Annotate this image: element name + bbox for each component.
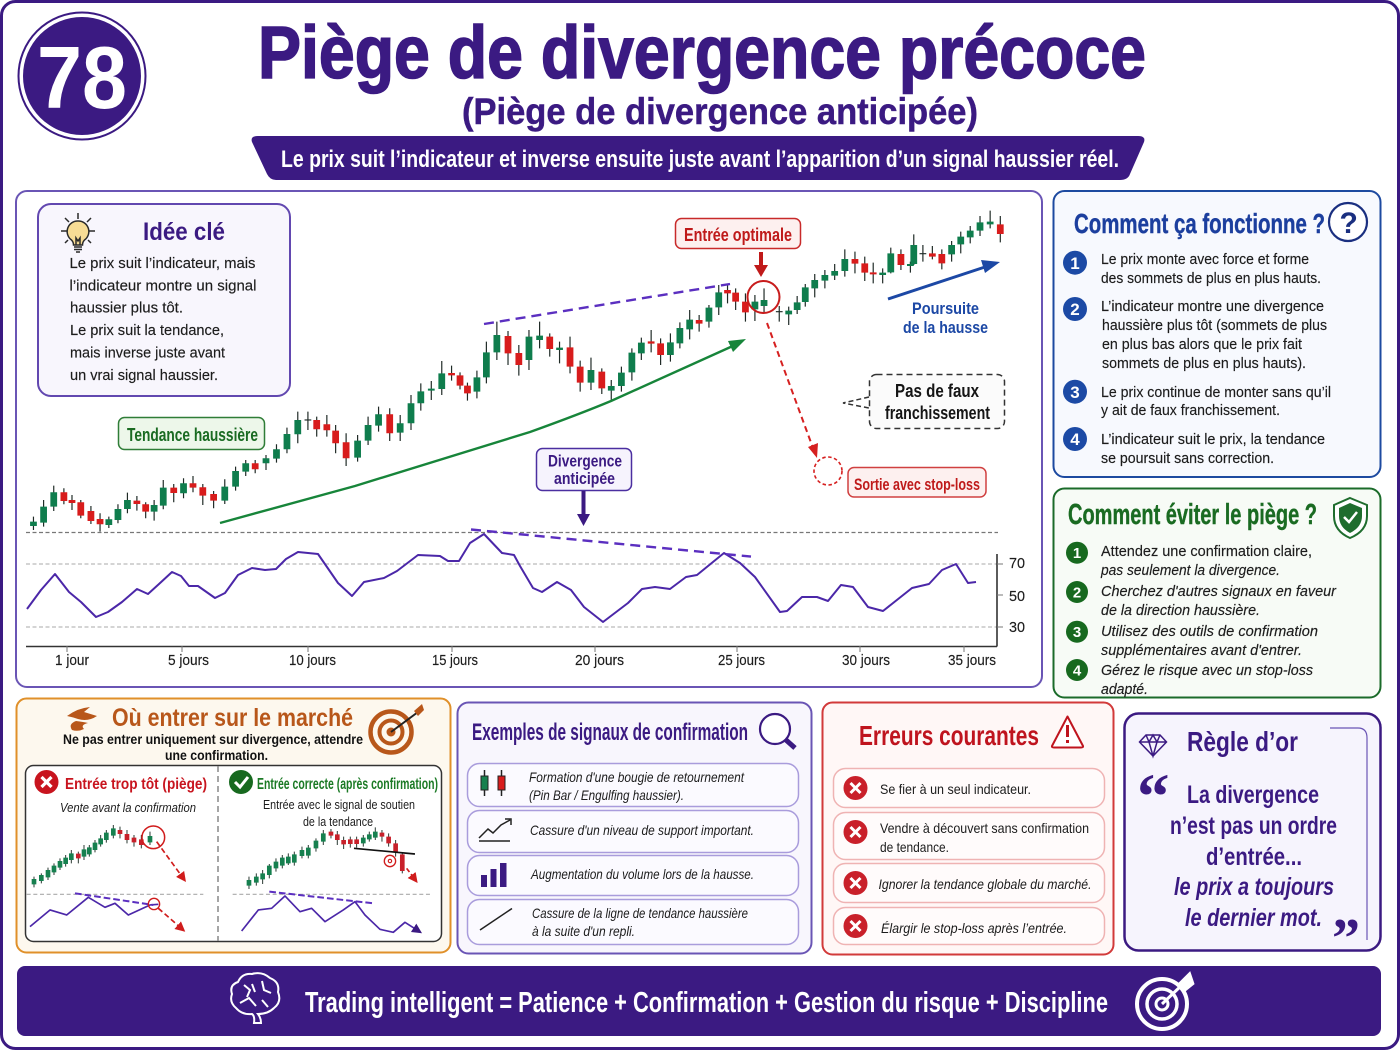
icon: target: [1137, 972, 1194, 1029]
label: optimal entry: Entrée optimale: [684, 225, 792, 245]
indicator reference lines: [26, 532, 998, 627]
heading: Règle d’or: [1187, 726, 1298, 757]
quote text: [1170, 781, 1337, 932]
heading: too early: Entrée trop tôt (piège): [65, 776, 207, 793]
label: early divergence: [536, 448, 632, 490]
row: support break: [468, 810, 798, 852]
key idea text: un vrai signal haussier.: [70, 367, 218, 384]
arrow: divergence down: [577, 491, 590, 526]
tip numbers: 2: [1073, 584, 1081, 602]
green trend arrow: [220, 339, 746, 523]
steps text: en plus bas alors que le prix fait: [1102, 336, 1303, 353]
row: trendline break: à la suite d'un repli.: [532, 923, 635, 939]
tips text: pas seulement la divergence.: [1100, 562, 1280, 579]
footer banner: [17, 966, 1381, 1036]
caption: too early: Vente avant la confirmation: [60, 800, 196, 815]
arrow: entry down: [754, 252, 768, 277]
step numbers: 1: [1070, 254, 1080, 273]
time axis: [26, 554, 1025, 669]
label: early divergence: Divergence: [548, 452, 622, 470]
row: ignore trend: Ignorer la tendance globale du marché.: [878, 876, 1092, 892]
quote text: d’entrée...: [1206, 843, 1302, 871]
price divergence line: [484, 284, 730, 324]
panel: confirmation signals: [458, 702, 812, 954]
price candlesticks: [33, 211, 1000, 532]
number badge: 78: [37, 28, 127, 127]
panel: common mistakes: [822, 702, 1114, 954]
row: trendline break: Cassure de la ligne de tendance haussière: [532, 905, 748, 921]
steps text: sommets de plus en plus hauts).: [1102, 355, 1306, 372]
row: single indicator: [834, 768, 1104, 808]
indicator divergence line: [471, 530, 751, 557]
step numbers: 2: [1070, 300, 1080, 319]
time axis: 5 jours: [168, 652, 209, 669]
icon: shield: [1334, 498, 1367, 538]
tip numbers: [1066, 542, 1088, 681]
heading: Idée clé: [143, 218, 225, 246]
icon: swoosh: [67, 707, 97, 731]
key idea text: haussier plus tôt.: [70, 300, 183, 316]
panel: avoid the trap: [1054, 488, 1380, 698]
title: Piège de divergence précoce: [258, 11, 1146, 94]
key idea text: mais inverse juste avant: [70, 344, 226, 362]
steps text: Le prix continue de monter sans qu’il: [1101, 384, 1331, 401]
tips text: supplémentaires avant d'entrer.: [1101, 642, 1302, 659]
time axis: 10 jours: [289, 652, 336, 669]
closing quote: ”: [1332, 908, 1360, 970]
time axis: 30 jours: [842, 652, 890, 669]
row: short selling: de tendance.: [880, 839, 949, 855]
key idea text: Le prix suit la tendance,: [70, 322, 224, 339]
steps text: y ait de faux franchissement.: [1101, 402, 1280, 419]
icon: check: [229, 770, 253, 794]
panel: how it works: [1054, 191, 1380, 477]
icon: diamond: [1140, 735, 1166, 756]
row: reversal candle: (Pin Bar / Engulfing haussier).: [529, 787, 684, 803]
time axis: 15 jours: [432, 652, 478, 669]
heading: Exemples de signaux de confirmation: [472, 719, 748, 746]
steps text: L’indicateur suit le prix, la tendance: [1101, 431, 1325, 448]
label: uptrend: [118, 418, 264, 450]
time axis: 70: [1009, 555, 1025, 572]
key idea text: Le prix suit l’indicateur, mais: [70, 255, 256, 272]
inner comparison box: [26, 766, 442, 942]
row: widen stop: Élargir le stop-loss après l’entrée.: [881, 920, 1067, 936]
tip numbers: 3: [1073, 624, 1081, 641]
ribbon tagline: Le prix suit l’indicateur et inverse ensuite juste avant l’apparition d’un signal haussier réel.: [281, 146, 1119, 173]
steps text: Le prix monte avec force et forme: [1101, 251, 1309, 268]
subtitle: [63, 732, 363, 763]
chart: early entry: [27, 825, 203, 931]
steps text: haussière plus tôt (sommets de plus: [1102, 317, 1327, 334]
chart: correct entry: [233, 827, 431, 932]
time axis: 50: [1009, 588, 1025, 605]
indicator line: [27, 534, 976, 622]
tips text: [1100, 543, 1337, 698]
label: continuation: de la hausse: [903, 318, 988, 337]
quote text: La divergence: [1187, 781, 1319, 809]
caption: correct entry: de la tendance: [303, 814, 373, 829]
tip numbers: 4: [1073, 662, 1082, 680]
tips text: Attendez une confirmation claire,: [1101, 543, 1312, 560]
opening quote: “: [1137, 761, 1170, 833]
label: stop-loss exit: [848, 468, 986, 497]
icon: target: [370, 704, 424, 752]
quote text: n’est pas un ordre: [1170, 812, 1337, 840]
tips text: Utilisez des outils de confirmation: [1101, 623, 1318, 640]
number badge: [18, 12, 146, 140]
tip numbers: 1: [1073, 545, 1081, 562]
label: continuation: [903, 299, 988, 337]
heading: Où entrer sur le marché: [112, 704, 353, 732]
tips text: Gérez le risque avec un stop-loss: [1101, 662, 1313, 679]
row: support break: Cassure d'un niveau de support important.: [530, 822, 754, 838]
arrow: stop-loss path: [767, 323, 818, 458]
row: short selling: Vendre à découvert sans confirmation: [880, 820, 1089, 836]
row: volume: Augmentation du volume lors de la hausse.: [530, 866, 754, 882]
circle: stop-loss point: [814, 457, 842, 485]
callout: no false breakout: Pas de faux: [895, 381, 979, 401]
panel: golden rule: [1124, 714, 1380, 970]
steps text: L’indicateur montre une divergence: [1101, 298, 1324, 315]
callout: no false breakout: franchissement: [885, 403, 990, 423]
caption: correct entry: Entrée avec le signal de soutien: [263, 797, 415, 812]
steps text: des sommets de plus en plus hauts.: [1101, 270, 1321, 287]
time axis: 35 jours: [948, 652, 996, 669]
panel: main chart: [16, 191, 1042, 687]
row: single indicator: Se fier à un seul indicateur.: [880, 781, 1031, 797]
key idea text: l’indicateur montre un signal: [70, 278, 256, 294]
key idea text: [70, 255, 256, 384]
tips text: adapté.: [1101, 681, 1148, 698]
row: trendline break: [468, 900, 798, 944]
row: reversal candle: [468, 764, 798, 806]
blue continuation arrow: [888, 260, 1000, 299]
time axis: 30: [1009, 619, 1025, 636]
callout: no false breakout: [843, 374, 1004, 428]
icon: brain: [231, 973, 279, 1023]
icon: question mark: [1329, 203, 1367, 241]
step numbers: 4: [1070, 430, 1080, 449]
label: stop-loss exit: Sortie avec stop-loss: [854, 475, 980, 494]
quote text: le dernier mot.: [1185, 904, 1322, 932]
panel: key idea: [38, 204, 290, 396]
subtitle: Ne pas entrer uniquement sur divergence, attendre: [63, 732, 363, 747]
subtitle: (Piège de divergence anticipée): [462, 91, 978, 132]
icon: light bulb: [61, 213, 95, 252]
steps text: se poursuit sans correction.: [1101, 450, 1274, 467]
footer text: Trading intelligent = Patience + Confirmation + Gestion du risque + Discipline: [305, 987, 1108, 1019]
tips text: de la direction haussière.: [1101, 602, 1260, 619]
row: reversal candle: Formation d'une bougie de retournement: [529, 769, 745, 785]
label: optimal entry: [676, 218, 800, 248]
time axis: 20 jours: [575, 652, 624, 669]
row: ignore trend: [834, 864, 1104, 902]
steps text: [1101, 251, 1331, 467]
row: short selling: [834, 812, 1104, 860]
time axis: 25 jours: [718, 652, 765, 669]
tips text: Cherchez d'autres signaux en faveur: [1101, 583, 1337, 600]
icon: cross: [34, 770, 58, 794]
icon: magnifier: [760, 714, 795, 748]
icon: warning: [1052, 716, 1083, 748]
step numbers: 3: [1070, 383, 1080, 402]
heading: Erreurs courantes: [859, 720, 1039, 751]
row: volume: [468, 856, 798, 896]
heading: correct entry: Entrée correcte (après confirmation): [257, 776, 438, 793]
time axis: 1 jour: [55, 652, 89, 669]
circle: entry point: [748, 281, 780, 313]
subtitle: une confirmation.: [165, 748, 268, 763]
quote text: le prix a toujours: [1174, 873, 1334, 901]
label: early divergence: anticipée: [554, 470, 615, 488]
step numbers: [1063, 251, 1087, 451]
caption: correct entry: [263, 797, 415, 829]
label: continuation: Poursuite: [912, 299, 979, 318]
ribbon tagline: [252, 136, 1144, 180]
row: widen stop: [834, 908, 1104, 944]
label: uptrend: Tendance haussière: [127, 425, 258, 445]
panel: where to enter: [16, 698, 450, 952]
icon: question mark: ?: [1340, 207, 1358, 240]
